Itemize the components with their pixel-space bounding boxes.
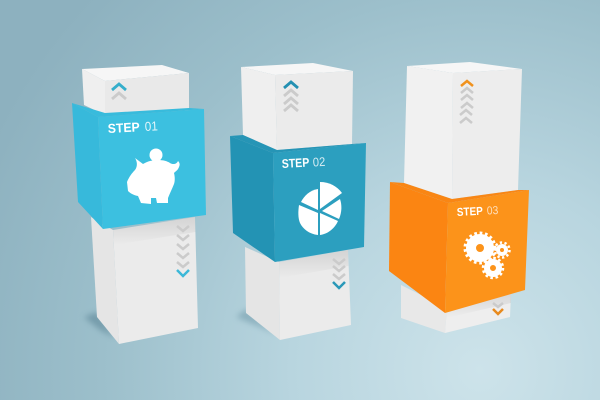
lower chevrons 3 — [493, 303, 503, 314]
lower chevrons 2 — [333, 259, 345, 288]
icon: piggy bank — [127, 148, 180, 204]
teal box — [230, 135, 366, 262]
icon: pie chart — [298, 182, 342, 235]
upper chevrons 3 — [460, 81, 473, 123]
ground shadow 2 — [236, 309, 276, 335]
upper chevrons 1 — [112, 84, 126, 99]
ground shadow 1 — [84, 312, 115, 338]
step 1 label: STEP — [107, 119, 140, 136]
lower white box 3 — [401, 285, 511, 333]
orange box — [389, 182, 529, 313]
step 3 label: STEP — [457, 206, 483, 219]
lower chevrons 1 — [177, 226, 189, 276]
column: step 1 — [72, 65, 206, 344]
cyan box — [72, 103, 206, 229]
upper chevrons 2 — [284, 82, 298, 111]
step 1 label — [107, 118, 158, 136]
step 1 label: 01 — [144, 118, 158, 134]
upper white box 1 — [82, 65, 189, 115]
step 3 label: 03 — [487, 205, 499, 217]
step 2 label: 02 — [312, 155, 326, 169]
upper white box 2 — [241, 63, 353, 150]
upper white box 3 — [404, 62, 522, 199]
lower white box 2 — [245, 247, 351, 340]
column: step 3 — [389, 62, 529, 333]
step 2 label: STEP — [281, 156, 310, 171]
lower white box 1 — [91, 217, 198, 344]
icon: gears — [465, 233, 510, 278]
column: step 2 — [230, 63, 366, 340]
